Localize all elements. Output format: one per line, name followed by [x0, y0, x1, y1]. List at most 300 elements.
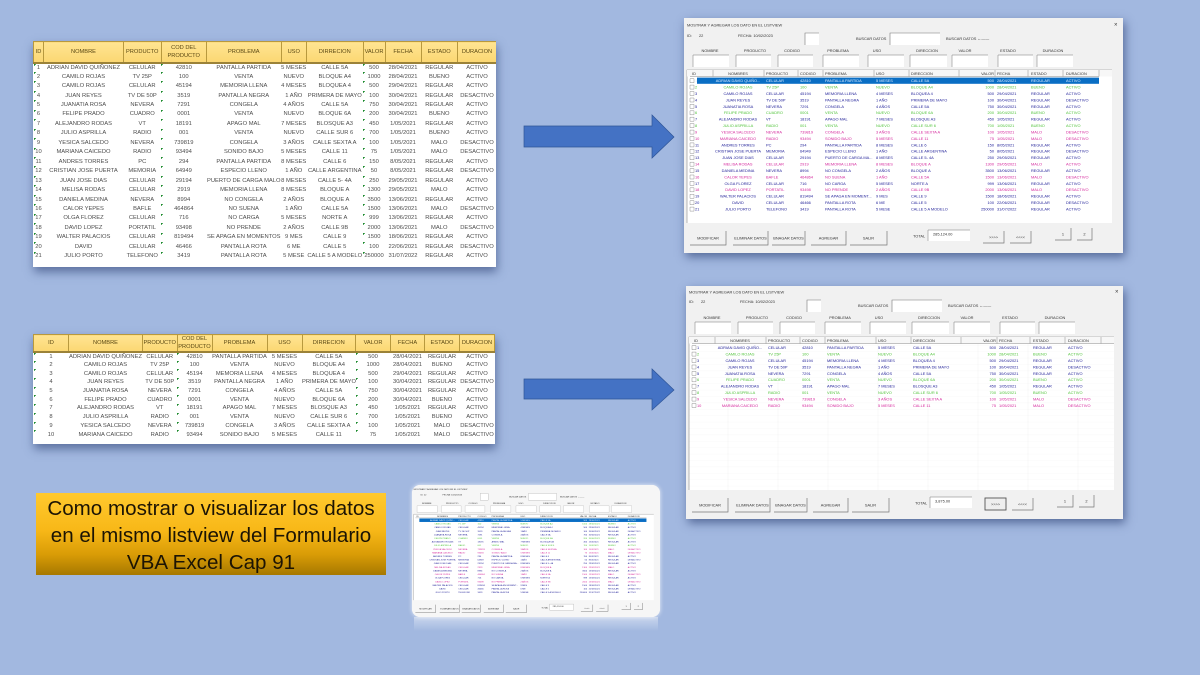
- panel: full excel table with 21 records: BLOQUEA 4: [318, 83, 351, 89]
- thumbnail rows: 100: [583, 531, 588, 533]
- panel: full excel table with 21 records: DESACTIVO: [460, 225, 494, 231]
- panel: full excel table with 21 records: 10: [35, 149, 42, 155]
- panel: full excel table with 21 records: CALLE ARGENTINA: [308, 168, 361, 174]
- thumbnail rows: 1500: [582, 574, 588, 576]
- listview rows: 22/06/2021: [997, 200, 1016, 205]
- thumbnail rows: CELULAR: [458, 577, 469, 580]
- thumbnail rows: 13/06/2021: [589, 578, 601, 580]
- thumbnail rows: CALLE 9: [540, 584, 550, 587]
- listview header: DIRECCION: [913, 338, 935, 343]
- listview rows: MALO: [1031, 136, 1042, 141]
- panel: full excel table with 21 records: SONIDO BAJO: [224, 149, 264, 155]
- listview rows: DESACTIVO: [1066, 130, 1088, 134]
- listview rows: 2919: [800, 162, 809, 167]
- panel: filtered excel table with 10 records: JUANATIA ROSA: [83, 388, 128, 394]
- listview rows: CELULAR: [766, 162, 784, 167]
- panel: filtered excel table with 10 records: BLOQUEA 4: [312, 371, 345, 377]
- panel: full excel table with 21 records: 18: [35, 225, 42, 231]
- panel: full excel table with 21 records: VT: [139, 121, 146, 127]
- thumbnail rows: VENTA: [492, 523, 499, 526]
- thumbnail rows: VENTA: [492, 544, 499, 547]
- listview rows: 739819: [802, 396, 815, 402]
- thumbnail rows: NUEVO: [520, 545, 529, 547]
- listview rows: 500: [990, 358, 997, 363]
- panel: full excel table with 21 records: PANTALLA PARTIDA: [216, 65, 271, 71]
- thumbnail rows: 13/06/2021: [589, 571, 601, 572]
- thumbnail rows: BUENO: [608, 538, 616, 540]
- listview rows: 7291: [802, 371, 811, 376]
- listview rows: CALLE SEXTA A: [913, 396, 943, 402]
- panel: full excel table with 21 records: ACTIVO: [466, 130, 488, 136]
- panel: filtered excel table with 10 records: ALEJANDRO RODAS: [77, 405, 134, 411]
- listview rows: 750: [990, 371, 997, 376]
- panel: filtered excel table with 10 records: CAMILO ROJAS: [84, 371, 127, 377]
- thumbnail listview: [414, 514, 654, 600]
- panel: full excel table with 21 records: ACTIVO: [466, 234, 488, 240]
- panel: filtered excel table with 10 records: 9: [49, 423, 53, 429]
- panel: full excel table with 21 records: 294: [179, 159, 189, 165]
- top search controls: BUSCAR DATOS: [856, 36, 887, 41]
- listview rows: 700: [990, 390, 997, 395]
- field labels and inputs: CODIGO: [786, 315, 802, 320]
- thumbnail rows: REGULAR: [608, 562, 619, 565]
- listview rows: 999: [988, 181, 994, 186]
- panel: filtered excel table with 10 records: 30/04/2021: [393, 397, 422, 403]
- listview rows: 18/06/2021: [997, 194, 1016, 199]
- listview rows: CALLE SEXTA A: [911, 130, 941, 134]
- panel: full excel table with 21 records: NUEVO: [283, 74, 304, 80]
- thumbnail rows: DESACTIVO: [628, 551, 641, 554]
- thumbnail rows: 100: [478, 524, 482, 526]
- field labels and inputs: VALOR: [959, 48, 972, 53]
- listview rows: NEVERA: [766, 104, 782, 109]
- listview rows: TV DE 50P: [766, 97, 786, 102]
- thumbnail rows: ACTIVO: [628, 591, 636, 594]
- thumbnail rows: NO CARGA: [492, 577, 504, 580]
- listview rows: BLOQUE A4: [911, 84, 934, 90]
- listview rows: CONGELA: [825, 130, 844, 134]
- listview rows: NUEVO: [876, 84, 890, 90]
- panel: filtered excel table with 10 records: 30/04/2021: [393, 388, 422, 394]
- thumbnail rows: PORTATIL: [458, 580, 469, 583]
- listview rows: 20: [695, 200, 700, 205]
- listview rows: 4 AÑOS: [876, 104, 890, 109]
- panel: filtered excel table with 10 records: VENTA: [230, 362, 249, 368]
- field labels and inputs: USO: [873, 48, 881, 53]
- panel: full excel table with 21 records: ACTIVO: [466, 215, 488, 221]
- panel: filtered excel table with 10 records: BUENO: [432, 362, 452, 368]
- thumbnail rows: CALLE ARGENTINA: [540, 559, 561, 562]
- thumbnail rows: REGULAR: [608, 519, 619, 522]
- listview rows: 19: [695, 194, 699, 199]
- thumbnail title: MOSTRAR Y AGREGAR LOS DATO EN EL LISTVIEW: [414, 488, 468, 491]
- panel: full excel table with 21 records: ACTIVO: [466, 74, 488, 80]
- panel: filtered excel table with 10 records: ACTIVO: [466, 371, 488, 377]
- listview rows: CUADRO: [768, 377, 785, 382]
- panel: filtered excel table with 10 records: ACTIVO: [466, 388, 488, 394]
- listview rows: CRISTIAN JOSE PUERTA: [715, 149, 761, 154]
- listview rows: CELULAR: [768, 345, 786, 350]
- panel: full excel table with 21 records: 1/05/2021: [390, 149, 416, 155]
- panel: full excel table with 21 records: 3519: [177, 93, 190, 99]
- panel: full excel table with 21 records: 1: [37, 65, 40, 71]
- thumbnail rows: 2000: [582, 581, 588, 583]
- panel: full excel table with 21 records: NORTE A: [322, 215, 347, 221]
- listview rows: MELISA RODAS: [724, 162, 753, 167]
- listview rows: 9 MES: [876, 194, 888, 199]
- panel: full excel table with 21 records: DESACTIVO: [460, 149, 494, 155]
- listview rows: REGULAR: [1031, 155, 1050, 160]
- panel: full excel table with 21 records: TV 25P: [133, 74, 152, 80]
- panel: full excel table with 21 records: NO CONGELA: [224, 197, 263, 203]
- listview header: CODIGO: [802, 338, 818, 343]
- thumbnail rows: 3519: [478, 531, 483, 533]
- top search controls: 22: [699, 33, 703, 38]
- listview rows: CELULAR: [766, 181, 784, 186]
- panel: full excel table with 21 records: 200: [369, 111, 379, 117]
- panel: filtered excel table with 10 records: 100: [368, 423, 378, 429]
- thumbnail rows: JUAN JOSE DIAS: [434, 562, 452, 565]
- listview rows: 18191: [802, 384, 813, 389]
- panel: filtered excel table with 10 records: USO: [278, 340, 291, 346]
- panel: full excel table with 21 records: RADIO: [133, 149, 151, 155]
- panel: filtered excel table with 10 records: 5 MESES: [272, 354, 297, 360]
- listview rows: CONGELA: [825, 104, 844, 109]
- thumbnail rows: DESACTIVO: [628, 548, 641, 551]
- thumbnail rows: 13/06/2021: [589, 574, 601, 576]
- panel: full excel table with 21 records: PANTALLA ROTA: [221, 253, 267, 259]
- panel: full excel table with 21 records: CALLE 5A: [321, 102, 348, 108]
- thumbnail rows: BLOQUE A4: [540, 523, 553, 526]
- listview rows: 5 MESES: [878, 345, 895, 350]
- thumbnail rows: CELULAR: [458, 584, 469, 587]
- listview rows: REGULAR: [1031, 91, 1050, 96]
- listview rows: ADRIAN DAVID QUIÑO...: [716, 78, 760, 83]
- listview rows: SONIDO BAJO: [827, 403, 854, 408]
- panel: full excel table with 21 records: MALO: [431, 225, 447, 231]
- top search controls: [689, 299, 991, 312]
- listview rows: TV 25P: [766, 84, 779, 90]
- listview rows: CALOR YEPES: [724, 174, 752, 179]
- panel: filtered excel table with 10 records: 200: [368, 397, 378, 403]
- thumbnail rows: 2919: [478, 567, 483, 569]
- panel: filtered excel table with 10 records: MARIANA CAICEDO: [78, 432, 133, 438]
- listview rows: REGULAR: [1031, 200, 1050, 205]
- thumbnail rows: MEMORIA LLENA: [492, 526, 510, 529]
- listview rows: 200: [988, 110, 995, 115]
- listview rows: NUEVO: [878, 352, 892, 356]
- listview rows: 0001: [800, 110, 809, 115]
- panel: filtered excel table with 10 records: 3519: [188, 379, 201, 385]
- action buttons: MODIFICAR: [697, 236, 719, 240]
- thumbnail rows: DAVID: [439, 588, 446, 591]
- thumbnail listview: PRODUCTO: [458, 516, 471, 518]
- panel: full excel table with 21 records: DESACTIVO: [460, 140, 494, 146]
- thumbnail rows: 2 AÑOS: [520, 580, 529, 583]
- panel: full excel table with 21 records: CRISTIAN JOSE PUERTA: [49, 168, 118, 174]
- action buttons: AGREGAR: [821, 502, 840, 508]
- panel: filtered excel table with 10 records: 0001: [188, 397, 201, 403]
- action buttons: <<<<: [1016, 234, 1026, 240]
- panel: filtered excel table with 10 records: DESACTIVO: [460, 379, 494, 385]
- listview rows: 8/05/2021: [997, 149, 1014, 154]
- thumbnail rows: 999: [583, 578, 588, 580]
- listview rows: 250000: [981, 206, 995, 212]
- listview rows: ACTIVO: [1066, 110, 1080, 115]
- listview rows: CALLE 5A: [911, 174, 930, 179]
- panel: filtered excel table with 10 records: NUEVO: [274, 414, 295, 420]
- listview rows: NO PRENDE: [825, 187, 849, 192]
- listview rows: PC: [766, 142, 772, 147]
- thumbnail rows: 1/05/2021: [589, 549, 599, 551]
- thumbnail rows: JUANATIA ROSA: [434, 533, 452, 536]
- panel: full excel table with 21 records: NUEVO: [283, 130, 304, 136]
- listview rows: ACTIVO: [1066, 162, 1080, 167]
- action buttons: 285,124.00: [933, 232, 953, 236]
- listview rows: 3 AÑOS: [878, 396, 892, 402]
- action buttons: 2: [1083, 232, 1086, 236]
- listview rows: CALLE 5- 4A: [911, 155, 934, 160]
- listview rows: JUANATIA ROSA: [723, 104, 754, 109]
- panel: full excel table with 21 records: ACTIVO: [466, 121, 488, 127]
- listview rows: ACTIVO: [1066, 168, 1080, 173]
- panel: full excel table with 21 records: 100: [369, 244, 379, 250]
- thumbnail rows: YESICA SALCEDO: [433, 548, 452, 551]
- thumbnail rows: BLOQUE A: [540, 570, 552, 572]
- listview rows: 11: [695, 142, 699, 147]
- listview rows: TV 25P: [768, 352, 781, 356]
- thumbnail buttons: <<<<: [600, 607, 605, 610]
- panel: full excel table with 21 records: 9 MES: [285, 234, 302, 240]
- listview rows: 250: [988, 155, 995, 160]
- panel: filtered excel table with 10 records: REGULAR: [428, 388, 456, 394]
- listview rows: 64949: [800, 149, 811, 154]
- listview rows: MALO: [1033, 403, 1044, 408]
- listview rows: 1300: [985, 162, 995, 167]
- listview rows: 7: [697, 384, 699, 389]
- thumbnail rows: 42810: [478, 520, 484, 522]
- title text: [47, 496, 375, 574]
- panel: full excel table with 21 records: 8 MESES: [281, 159, 306, 165]
- listview rows: 5 MESES: [878, 403, 895, 408]
- listview rows: 6 ME: [876, 200, 885, 205]
- action buttons: ELIMINAR DATOS: [736, 502, 769, 508]
- panel: filtered excel table with 10 records: 18191: [186, 405, 203, 411]
- listview rows: DESACTIVO: [1066, 149, 1088, 154]
- thumbnail rows: ACTIVO: [628, 526, 636, 529]
- listview rows: REGULAR: [1031, 78, 1050, 83]
- listview rows: 001: [800, 123, 806, 128]
- listview rows: BUENO: [1031, 110, 1045, 115]
- thumbnail rows: MEMORIA LLENA: [492, 566, 510, 569]
- panel: full excel table with 21 records: 29/05/2021: [388, 178, 418, 184]
- panel: full excel table with 21 records: 250: [369, 178, 379, 184]
- panel: full excel table with 21 records: NO SUENA: [229, 206, 259, 212]
- panel: full excel table with 21 records: 819494: [174, 234, 193, 240]
- thumbnail rows: 1/05/2021: [589, 552, 599, 554]
- listview rows: 21: [695, 206, 699, 212]
- thumbnail rows: NO CONGELA: [492, 570, 507, 572]
- listview rows: PANTALLA PARTIDA: [825, 78, 862, 83]
- panel: full excel table with 21 records: COD DEL PRODUCTO: [168, 45, 200, 59]
- panel: filtered excel table with 10 records: 5: [49, 388, 53, 394]
- top search controls: BUSCAR DATOS: [858, 303, 889, 308]
- listview rows: 75: [990, 136, 994, 141]
- panel: full excel table with 21 records: 1/05/2021: [390, 121, 416, 127]
- panel: filtered excel table with 10 records: 2: [49, 362, 53, 368]
- listview rows: PANTALLA NEGRA: [827, 364, 861, 369]
- panel: full excel table with 21 records: 1300: [368, 187, 380, 193]
- panel: full excel table with 21 records: 4: [37, 93, 40, 99]
- thumbnail rows: 716: [478, 578, 482, 580]
- thumbnail rows: ACTIVO: [628, 577, 636, 580]
- top search controls: 22: [701, 299, 705, 304]
- listview rows: 10: [695, 136, 700, 141]
- listview rows: MALO: [1031, 174, 1042, 179]
- top search controls: BUSCAR DATOS ←——: [946, 36, 989, 41]
- listview rows: NEVERA: [766, 130, 782, 134]
- panel: full excel table with 21 records: 5 MESES: [281, 215, 306, 221]
- listview rows: 700: [988, 123, 995, 128]
- panel: full excel table with 21 records: CALLE 5- 4A: [318, 178, 352, 184]
- panel: full excel table with 21 records: [33, 41, 496, 267]
- thumbnail rows: REGULAR: [608, 584, 619, 587]
- listview rows: BLOQUE A4: [913, 352, 936, 356]
- thumbnail rows: MALO: [608, 548, 615, 551]
- listview rows: CELULAR: [766, 155, 784, 160]
- panel: filtered excel table with 10 records: CALLE SUR 6: [310, 414, 347, 420]
- thumbnail listview: FECHA: [589, 515, 597, 518]
- panel: filtered excel table with 10 records: DURACION: [462, 340, 492, 346]
- thumbnail rows: PANTALLA NEGRA: [492, 530, 511, 533]
- action buttons: 3,875.00: [935, 498, 951, 504]
- thumbnail rows: 5 MESES: [520, 578, 531, 580]
- panel: full excel table with 21 records: 750: [369, 102, 379, 108]
- listview rows: 716: [800, 181, 806, 186]
- panel: full excel table with 21 records: 13/06/2021: [388, 197, 418, 203]
- listview rows: [695, 78, 1088, 211]
- listview rows: CELULAR: [766, 200, 784, 205]
- thumbnail listview: USO: [520, 516, 526, 518]
- listview header: NOMBRES: [728, 71, 748, 76]
- listview rows: REGULAR: [1031, 168, 1050, 173]
- panel: full excel table with 21 records: 20: [35, 244, 42, 250]
- thumbnail rows: [430, 519, 641, 594]
- field labels and inputs: ESTADO: [1000, 48, 1016, 53]
- listview rows: DESACTIVO: [1066, 200, 1088, 205]
- thumbnail rows: REGULAR: [608, 555, 619, 558]
- listview rows: 8 MESES: [876, 162, 893, 167]
- thumbnail rows: CRISTIAN JOSE PUERTA: [430, 559, 456, 562]
- listview rows: 13: [695, 155, 699, 160]
- listview rows: 1 AÑO: [878, 364, 889, 369]
- panel: filtered excel table with 10 records: MEMORIA LLENA: [216, 371, 263, 377]
- top search controls: FECHA: 10/02/2023: [738, 33, 773, 38]
- listview rows: VENTA: [827, 390, 840, 395]
- listview rows: PANTALLA PARTIDA: [825, 142, 862, 147]
- listview rows: CAMILO ROJAS: [726, 352, 755, 356]
- panel: listview form with filtered records: [686, 286, 1123, 519]
- panel: full excel table with 21 records: 2 AÑOS: [283, 197, 304, 203]
- thumbnail rows: 1 AÑO: [520, 573, 527, 576]
- panel: full excel table with 21 records: 1 AÑO: [285, 168, 302, 174]
- thumbnail rows: WALTER PALACIOS: [432, 584, 453, 587]
- listview rows: NUEVO: [876, 110, 890, 115]
- thumbnail rows: 250: [583, 563, 588, 565]
- listview rows: 100: [990, 364, 997, 369]
- listview rows: 29/05/2021: [997, 162, 1016, 167]
- panel: full excel table with 21 records: 19: [35, 234, 42, 240]
- panel: full excel table with 21 records: 1/05/2021: [390, 140, 416, 146]
- thumbnail rows: OLGA FLOREZ: [435, 577, 451, 580]
- listview rows: CALLE 11: [913, 403, 930, 408]
- panel: filtered excel table with 10 records: CELULAR: [146, 371, 173, 377]
- close button: ×: [1115, 290, 1119, 296]
- thumbnail rows: ACTIVO: [628, 533, 636, 536]
- listview rows: 29/04/2021: [999, 358, 1018, 363]
- listview rows: MEMORIA LLENA: [825, 91, 857, 96]
- panel: full excel table with 21 records: 13/06/2021: [388, 215, 418, 221]
- listview rows: BLOQUEA 4: [913, 358, 936, 363]
- listview header: PROBLEMA: [827, 338, 849, 343]
- thumbnail listview: DIRECCION: [540, 516, 553, 518]
- listview rows: CALLE 6: [911, 142, 927, 147]
- listview rows: 5 MESES: [876, 136, 893, 141]
- panel: full excel table with 21 records: 46466: [176, 244, 192, 250]
- panel: full excel table with 21 records: CAMILO ROJAS: [62, 74, 105, 80]
- listview rows: 500: [990, 345, 997, 350]
- thumbnail rows: ACTIVO: [628, 541, 636, 544]
- field labels and inputs: PRODUCTO: [744, 48, 766, 53]
- panel: full excel table with 21 records: CALLE 5A: [321, 65, 348, 71]
- listview rows: 1 AÑO: [876, 97, 887, 102]
- listview rows: ADRIAN DAVID QUIÑO...: [718, 345, 762, 350]
- panel: full excel table with 21 records: NO CARGA: [228, 215, 259, 221]
- panel: filtered excel table with 10 records: 750: [368, 388, 378, 394]
- field labels and inputs: [695, 315, 1075, 334]
- thumbnail rows: TV DE 50P: [458, 531, 470, 533]
- panel: full excel table with 21 records: 1500: [368, 234, 380, 240]
- listview rows: 28/04/2021: [997, 78, 1016, 83]
- thumbnail rows: ACTIVO: [628, 523, 636, 526]
- panel: full excel table with 21 records: CALLE SEXTA A: [313, 140, 356, 146]
- thumbnail rows: VT: [458, 542, 462, 544]
- listview rows: 2000: [985, 187, 995, 192]
- listview rows: 30/04/2021: [999, 377, 1018, 382]
- panel: full excel table with 21 records: 29194: [176, 178, 192, 184]
- panel: full excel table with 21 records: 464864: [174, 206, 193, 212]
- thumbnail rows: CALLE SEXTA A: [540, 548, 557, 551]
- thumbnail search controls: [420, 493, 585, 500]
- panel: filtered excel table with 10 records: RADIO: [151, 432, 169, 438]
- panel: full excel table with 21 records: BLOQUE 6A: [318, 111, 351, 117]
- thumbnail rows: 3419: [478, 592, 483, 594]
- action buttons: SALIR: [865, 502, 876, 508]
- close button: ×: [1114, 22, 1118, 28]
- panel: full excel table with 21 records: REGULAR: [425, 121, 453, 127]
- listview rows: 5: [695, 104, 697, 109]
- listview rows: MALO: [1031, 187, 1042, 192]
- listview rows: 18: [695, 187, 699, 192]
- panel: full excel table with 21 records: CONGELA: [230, 140, 258, 146]
- title text: VBA Excel Cap 91: [127, 550, 295, 574]
- thumbnail rows: BAFLE: [458, 573, 466, 576]
- thumbnail rows: JULIO PORTO: [435, 592, 450, 594]
- listview rows: TV DE 50P: [768, 364, 788, 369]
- thumbnail rows: MEMORIA: [458, 559, 469, 562]
- thumbnail rows: 739819: [478, 549, 486, 551]
- panel: full excel table with 21 records: DESACTIVO: [460, 168, 494, 174]
